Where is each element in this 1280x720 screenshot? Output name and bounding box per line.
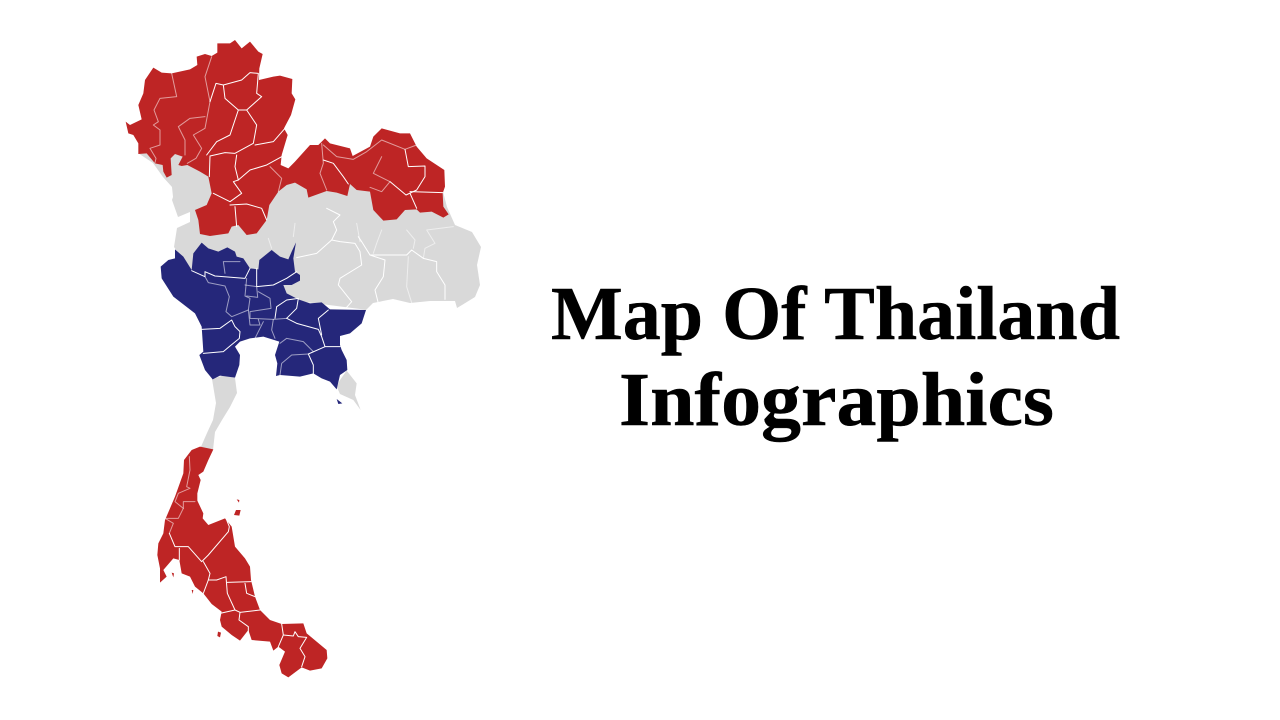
title [551,272,1120,442]
region: central and east (grey) [138,150,481,310]
map of Thailand [126,40,481,677]
region: eastern islands (grey) [337,371,361,410]
title line 1: Map Of Thailand [551,272,1120,356]
region: central (navy) [161,242,366,404]
region: north (red) [126,40,449,236]
region: isthmus (grey) [200,375,237,450]
title line 2: Infographics [619,358,1054,442]
region: south (red) [157,447,327,677]
